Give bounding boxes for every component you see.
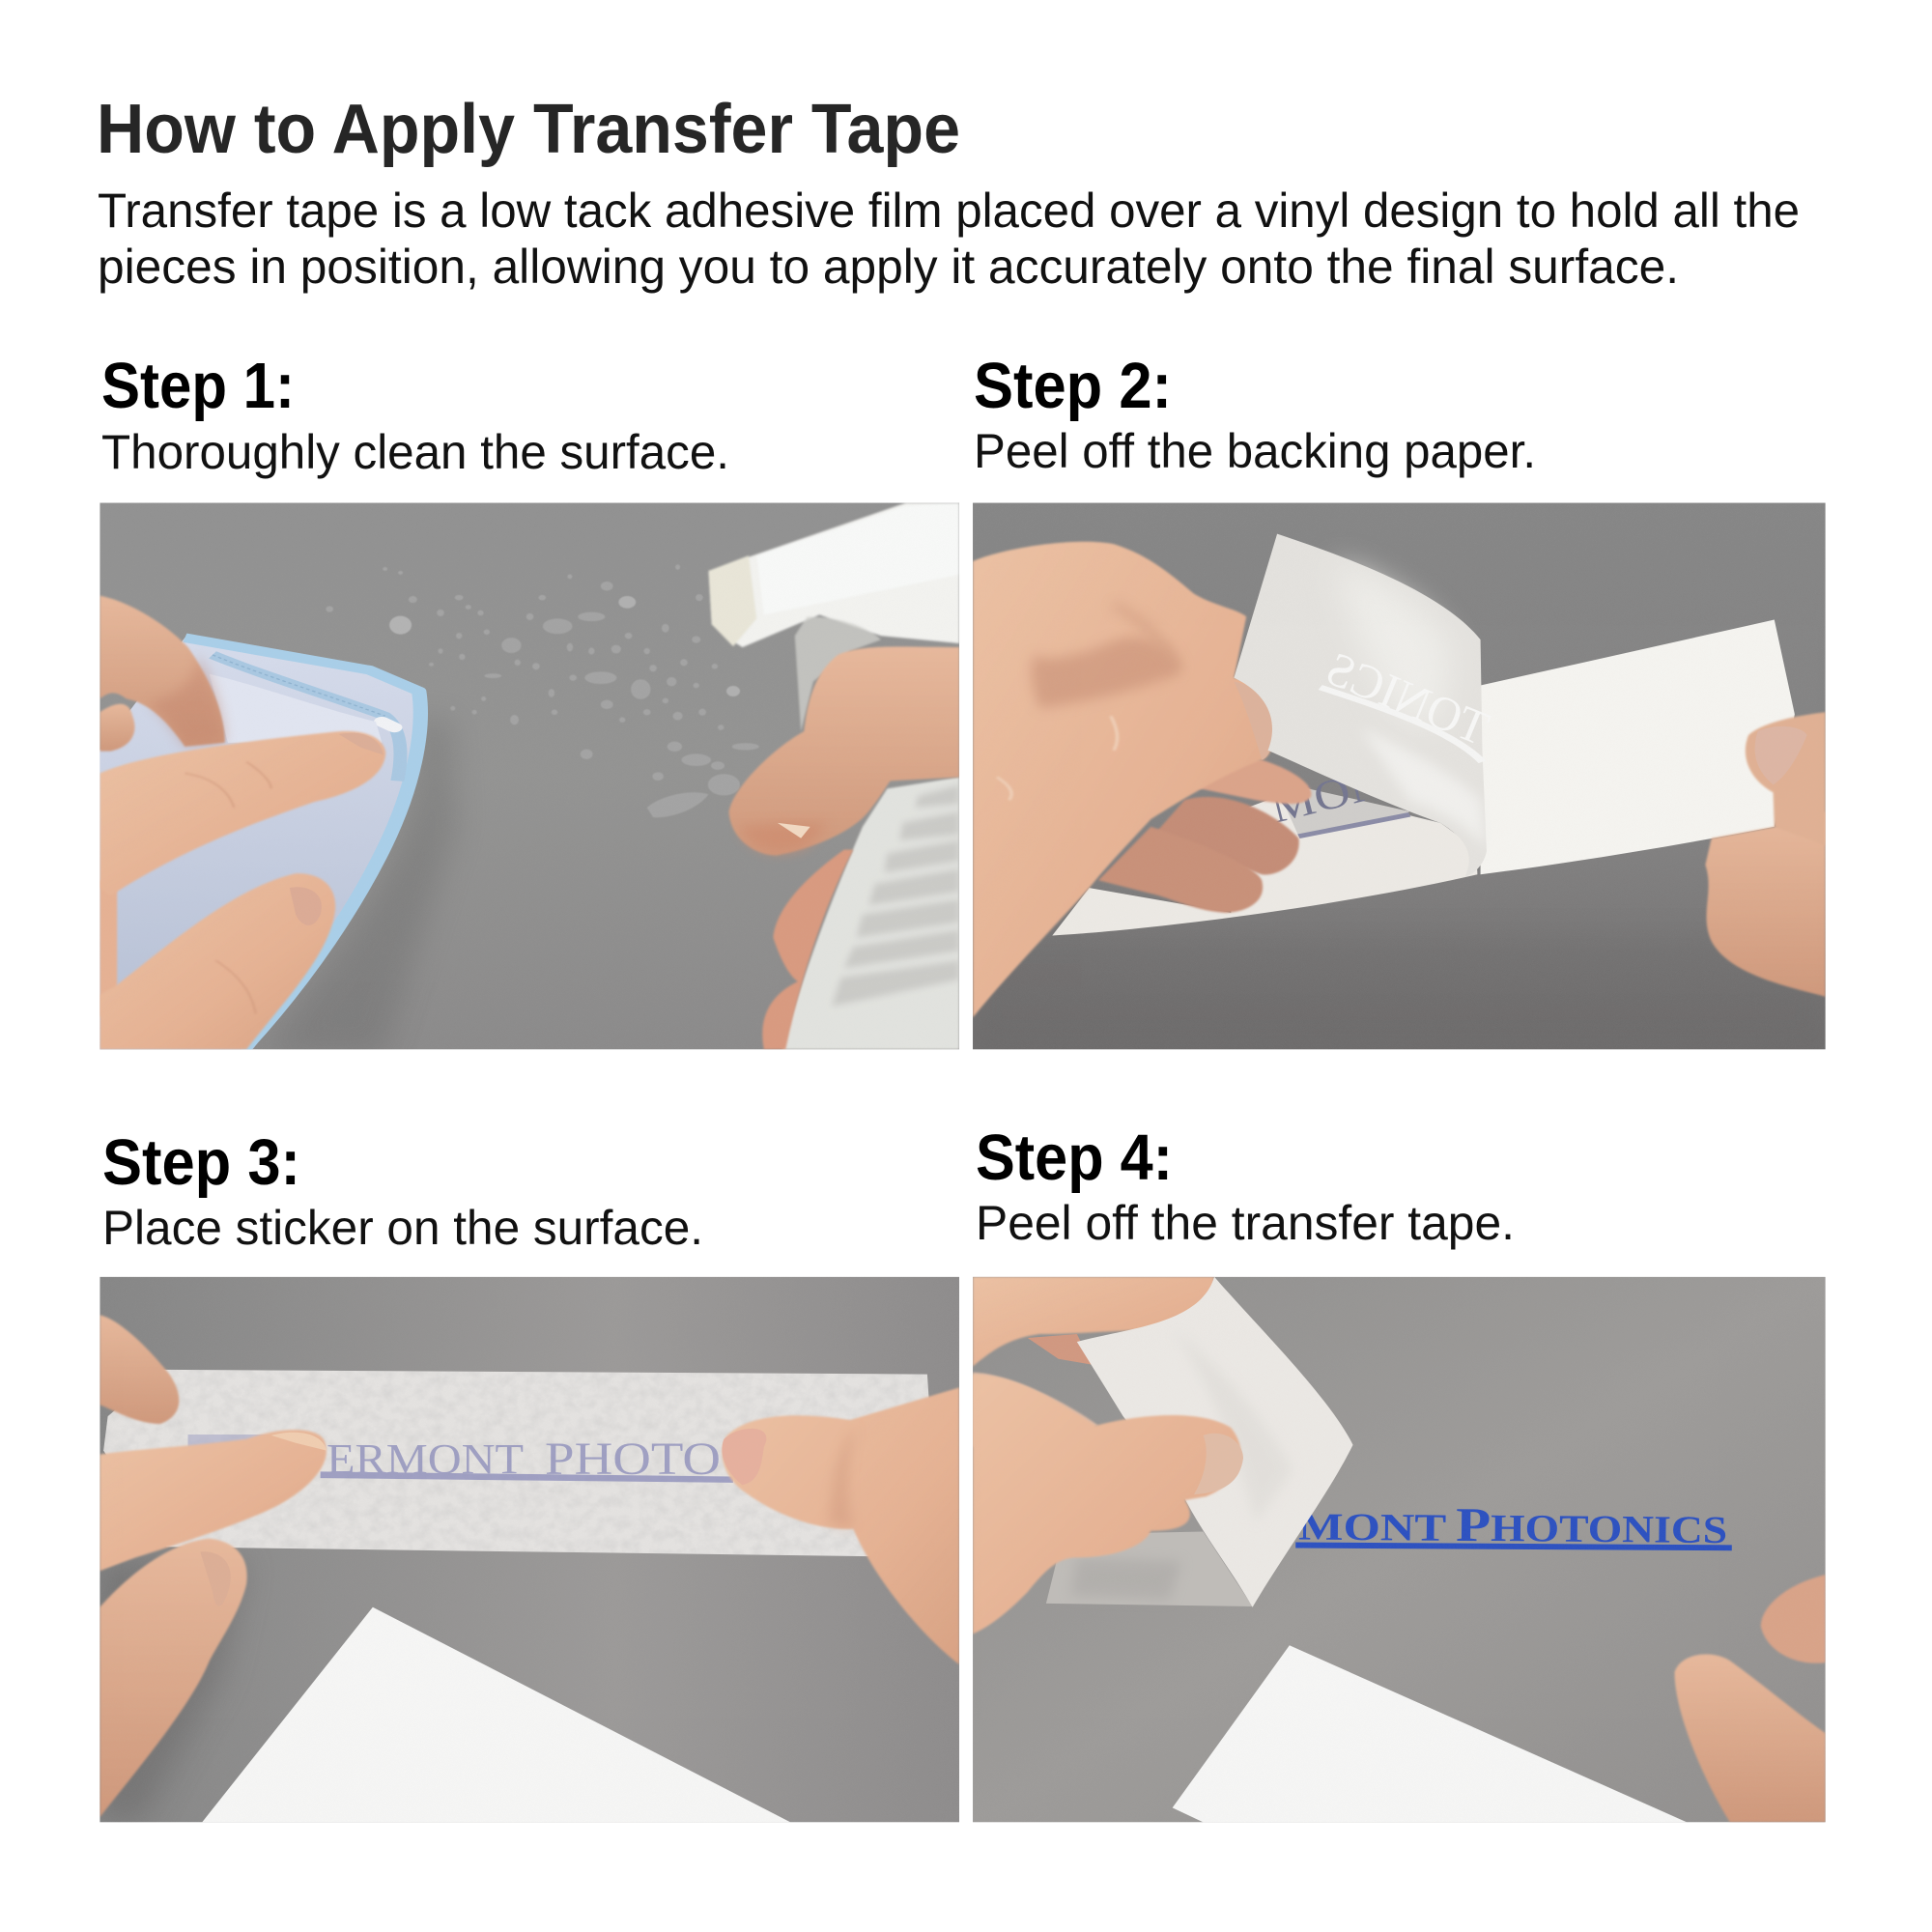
right hand: [729, 646, 959, 1049]
step 2 heading: [974, 350, 1536, 478]
intro text: Transfer tape is a low tack adhesive film placed over a vinyl design to hold all the: [98, 184, 1800, 238]
mirrored logo on tape: TONICS: [1319, 640, 1496, 755]
droplets: [326, 564, 759, 817]
step 3 heading: Step 3:: [102, 1126, 300, 1199]
left hand thumb: [973, 1375, 1243, 1634]
printed logo seen through tape: MON: [1266, 758, 1390, 833]
logo on surface: HOTONICS: [1491, 1506, 1727, 1551]
right hand: [722, 1387, 959, 1664]
step 4 heading: [976, 1122, 1515, 1250]
logo under tape: [188, 1434, 733, 1485]
peeled transfer tape: [1234, 534, 1496, 876]
left hand fingers back: [1098, 758, 1311, 913]
logo on surface: MONT: [1298, 1504, 1447, 1549]
intro text: [98, 184, 1800, 294]
backing paper: [1052, 620, 1795, 936]
right hand: [1705, 712, 1826, 997]
transfer tape: [99, 1367, 936, 1561]
left hand: [99, 596, 385, 1049]
step 1 heading: [101, 350, 729, 479]
left hand: [99, 1315, 327, 1817]
logo on surface: P: [1456, 1497, 1491, 1551]
step 1 heading: Thoroughly clean the surface.: [101, 425, 729, 479]
cloth: [99, 638, 456, 1056]
step 1 heading: Step 1:: [101, 350, 295, 422]
spray bottle nozzle: [708, 503, 959, 731]
title: How to Apply Transfer Tape: [97, 91, 960, 168]
right fingers: [1674, 1575, 1826, 1822]
panel: step 4 photo: [973, 1277, 1826, 1822]
left hand: [973, 542, 1275, 1018]
panel: step 1 photo: [99, 503, 959, 1056]
logo under tape: ERMONT: [327, 1435, 524, 1483]
white paper: [202, 1607, 790, 1822]
logo on surface: [1295, 1497, 1732, 1551]
step 4 heading: Step 4:: [976, 1122, 1173, 1194]
step 2 heading: Step 2:: [974, 350, 1172, 422]
bottle body: [782, 777, 959, 1049]
left hand back fingers: [973, 1277, 1214, 1447]
step 3 heading: [102, 1126, 703, 1255]
panel: step 2 photo: [973, 503, 1826, 1049]
logo under tape: PHOTO: [545, 1434, 721, 1485]
panel: step 3 photo: [99, 1277, 959, 1822]
intro text: pieces in position, allowing you to apply it accurately onto the final surface.: [98, 240, 1679, 294]
step 4 heading: Peel off the transfer tape.: [976, 1196, 1515, 1250]
step 2 heading: Peel off the backing paper.: [974, 424, 1536, 478]
transfer tape fold: [1046, 1277, 1353, 1607]
white paper: [1173, 1645, 1687, 1822]
step 3 heading: Place sticker on the surface.: [102, 1201, 703, 1255]
